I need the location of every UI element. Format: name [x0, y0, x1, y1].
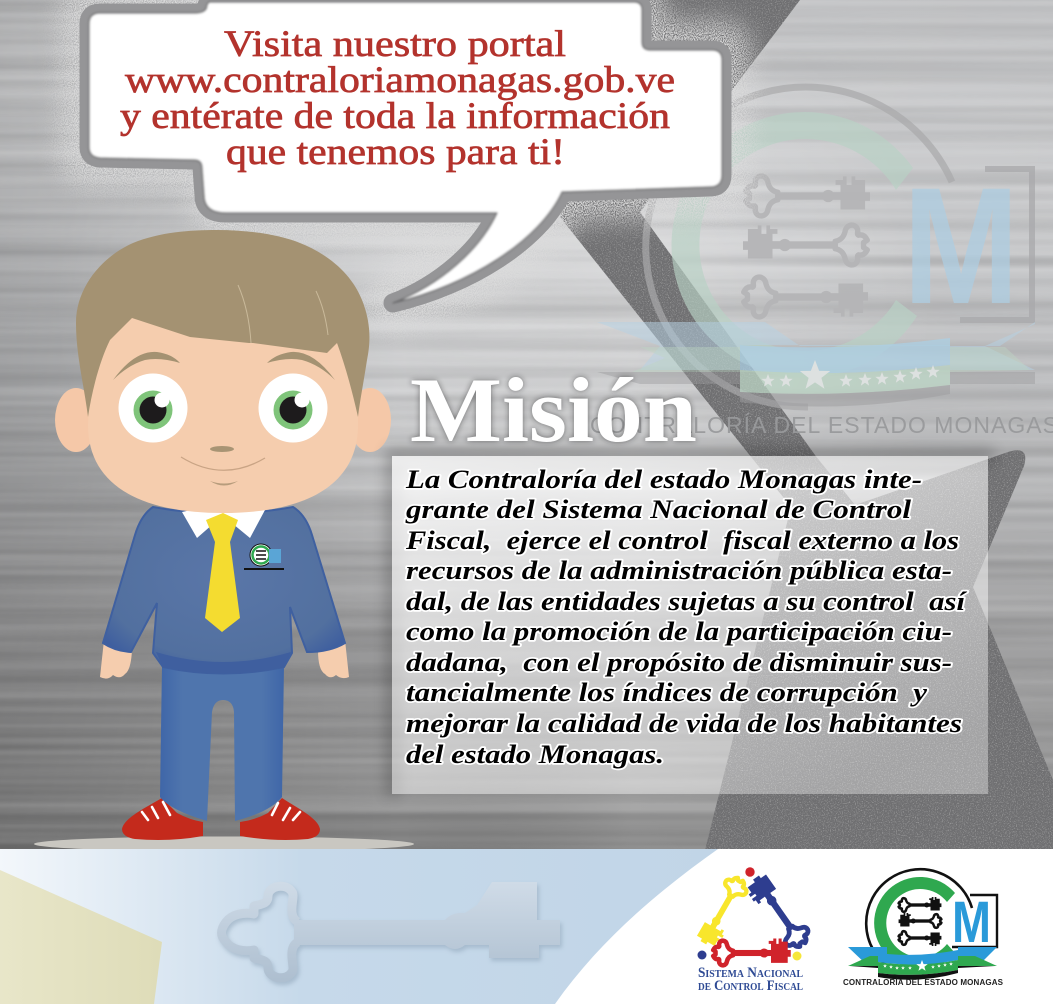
nose and mouth [181, 446, 265, 486]
logo dots [698, 867, 802, 960]
yellow key [694, 874, 752, 950]
large grey X shape [560, 0, 1053, 850]
logo caption: Sistema Nacional [698, 965, 803, 981]
logo: Sistema Nacional de Control Fiscal [694, 867, 813, 994]
speech bubble text: y entérate de toda la información [120, 96, 670, 137]
mission paragraph: recursos de la administración pública esta- [406, 556, 952, 585]
mission paragraph: dadana, con el propósito de disminuir sus- [406, 648, 952, 677]
logo M letter: M [952, 890, 991, 955]
speech bubble text: Visita nuestro portal [224, 24, 566, 65]
speech bubble [89, 2, 722, 303]
watermark ribbon [597, 322, 1035, 406]
watermark stars [761, 360, 940, 389]
panel: mission text backing [392, 456, 988, 794]
mission paragraph: del estado Monagas. [406, 740, 664, 769]
watermark ring [646, 87, 952, 407]
red key [713, 939, 791, 965]
logo green C [874, 877, 955, 969]
eyes [118, 374, 328, 442]
heading: Misión: Misión [410, 359, 697, 461]
hands [100, 640, 349, 679]
shoe laces [142, 802, 300, 820]
sweater [103, 507, 345, 674]
tie [205, 513, 240, 632]
mission paragraph: mejorar la calidad de vida de los habitantes [406, 709, 962, 738]
watermark keys [743, 176, 870, 317]
mission paragraph: grante del Sistema Nacional de Control [405, 495, 912, 524]
speech bubble text: que tenemos para ti! [226, 132, 565, 173]
mission paragraph [405, 465, 967, 769]
logo: Contraloría del Estado Monagas [843, 869, 1004, 987]
footer band [0, 849, 1053, 1004]
logo ribbon [848, 947, 997, 980]
hair [76, 230, 369, 417]
mission paragraph: tancialmente los índices de corrupción y [406, 678, 928, 707]
watermark M outline [960, 169, 1032, 320]
shoes [122, 798, 320, 840]
boy character [55, 230, 391, 840]
logo caption: CONTRALORÍA DEL ESTADO MONAGAS [843, 978, 1004, 987]
sweater badge [244, 544, 284, 570]
speech bubble text: www.contraloriamonagas.gob.ve [125, 60, 675, 101]
logo caption [698, 965, 803, 994]
ground shadow ellipse [34, 836, 414, 852]
logo M outline [952, 895, 997, 947]
footer key watermark [222, 882, 562, 981]
heading: Misión: Misión [410, 359, 697, 461]
ears [55, 388, 391, 452]
blue key [743, 870, 813, 953]
watermark M letter: M [903, 154, 1019, 339]
footer cream shape [0, 870, 162, 1004]
mission paragraph: como la promoción de la participación ciu- [406, 617, 952, 646]
trousers [160, 665, 284, 821]
logo ring [866, 869, 972, 968]
mission paragraph: Fiscal, ejerce el control fiscal externo a los [405, 526, 959, 555]
mission paragraph: La Contraloría del estado Monagas inte- [405, 465, 922, 494]
collar [182, 503, 265, 538]
speckled halo around speech bubble [89, 2, 722, 303]
speech bubble text [120, 24, 675, 173]
panel shadow [386, 448, 994, 796]
logo keys [899, 897, 941, 946]
face [88, 270, 358, 513]
watermark caption: CONTRALORÍA DEL ESTADO MONAGAS [590, 412, 1053, 438]
eyebrows [113, 352, 335, 380]
logo stars [883, 960, 953, 971]
mission paragraph: dal, de las entidades sujetas a su control así [406, 587, 967, 616]
logo caption: de Control Fiscal [698, 978, 803, 994]
watermark logo [590, 87, 1053, 438]
watermark green C [672, 112, 917, 378]
